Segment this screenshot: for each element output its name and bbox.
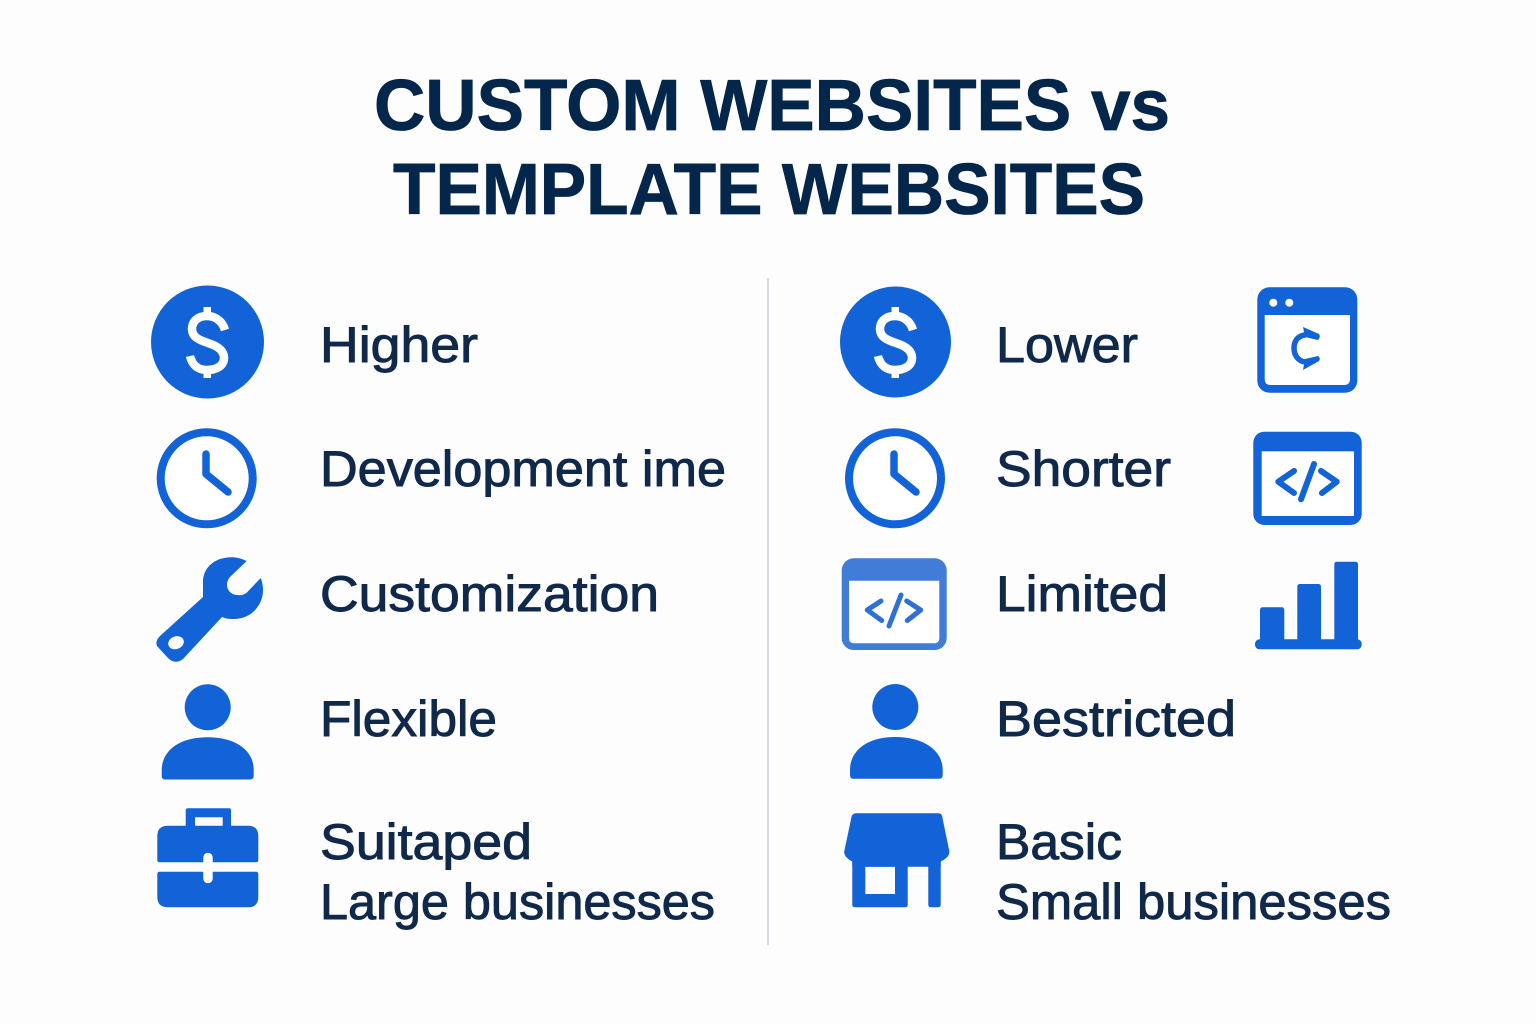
title: TEMPLATE WEBSITES bbox=[393, 150, 1145, 230]
icon: browser refresh bbox=[1257, 287, 1357, 393]
icon: briefcase bbox=[157, 808, 258, 907]
label: Lower: Lower bbox=[996, 317, 1138, 373]
icon: clock (custom) bbox=[161, 432, 253, 524]
panel: custom websites bbox=[151, 286, 726, 930]
icon: dollar circle (custom) bbox=[151, 286, 264, 398]
label: Flexible: Flexible bbox=[320, 691, 497, 747]
icon: bar chart bbox=[1255, 562, 1362, 649]
icon: clock (template) bbox=[849, 432, 941, 524]
label: Development time: Development ime bbox=[320, 441, 726, 497]
label: Restricted: Bestricted bbox=[996, 691, 1236, 747]
label: Basic, Small businesses bbox=[996, 814, 1391, 930]
icon: code window (light) bbox=[842, 558, 947, 650]
title bbox=[374, 66, 1170, 230]
icon: code window (dark) bbox=[1253, 432, 1362, 525]
panel: template websites bbox=[840, 286, 1391, 930]
icon: storefront bbox=[844, 813, 949, 907]
title: CUSTOM WEBSITES vs bbox=[374, 66, 1170, 146]
label: Limited: Limited bbox=[996, 566, 1168, 622]
label: Higher: Higher bbox=[320, 317, 478, 373]
label: Suitaped, Large businesses: Large businesses bbox=[320, 874, 715, 930]
icon: wrench bbox=[156, 557, 263, 662]
label: Shorter: Shorter bbox=[996, 441, 1171, 497]
label: Basic, Small businesses: Basic bbox=[996, 814, 1122, 870]
label: Suitaped, Large businesses: Suitaped bbox=[320, 814, 532, 870]
icon: dollar circle (template) bbox=[840, 286, 951, 398]
label: Suitaped, Large businesses bbox=[320, 814, 715, 930]
icon: person (custom) bbox=[162, 684, 254, 780]
label: Customization: Customization bbox=[320, 566, 659, 622]
label: Basic, Small businesses: Small businesses bbox=[996, 874, 1391, 930]
icon: person (template) bbox=[850, 684, 943, 779]
